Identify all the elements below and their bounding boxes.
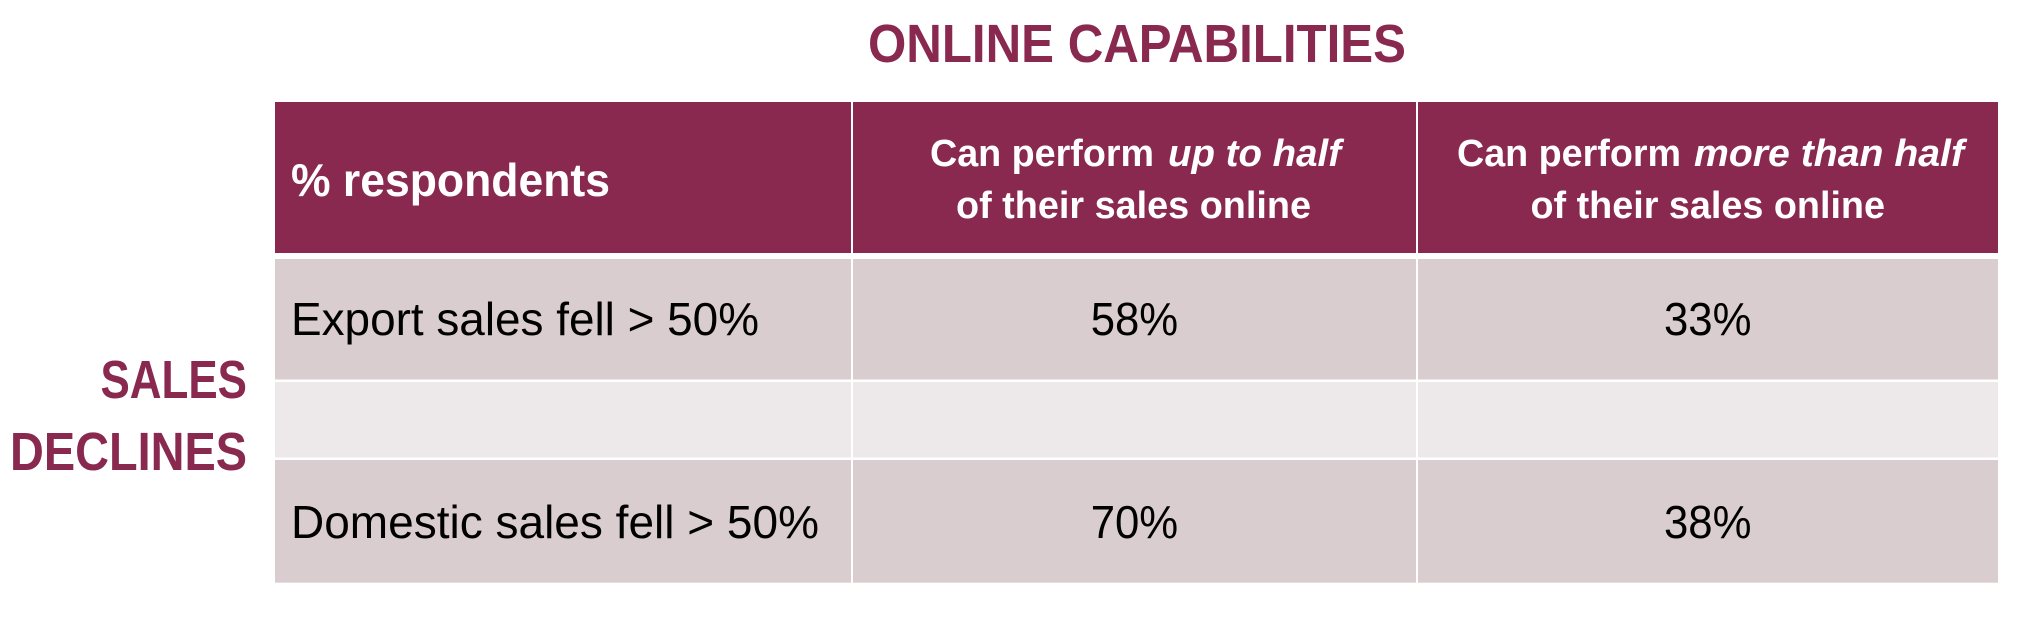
header: up to half: Can perform	[930, 133, 1154, 175]
header: up to half	[930, 133, 1344, 227]
side heading: sales declines: DECLINES	[10, 422, 247, 482]
row: export sales: Export sales fell > 50%	[291, 293, 759, 345]
table	[275, 102, 1998, 583]
header: more than half	[1457, 133, 1967, 227]
header: more than half: Can perform	[1457, 133, 1681, 175]
row: export sales: 58%	[1091, 293, 1178, 345]
row: domestic sales: 38%	[1664, 496, 1752, 548]
header: more than half: more than half	[1694, 133, 1967, 175]
row: domestic sales	[275, 460, 1998, 583]
header: up to half: of their sales online	[956, 185, 1311, 227]
side heading: sales declines	[10, 350, 247, 482]
row: domestic sales: 70%	[1091, 496, 1178, 548]
header: up to half: up to half	[1168, 133, 1344, 175]
title: online capabilities: ONLINE CAPABILITIES	[868, 14, 1406, 74]
row: export sales	[275, 259, 1998, 380]
row: domestic sales: Domestic sales fell > 50%	[291, 496, 819, 548]
header row	[275, 102, 1998, 253]
row: export sales: 33%	[1664, 293, 1752, 345]
header: % respondents: % respondents	[291, 154, 610, 206]
side heading: sales declines: SALES	[100, 350, 247, 410]
row: empty spacer	[275, 382, 1998, 458]
header: more than half: of their sales online	[1530, 185, 1885, 227]
